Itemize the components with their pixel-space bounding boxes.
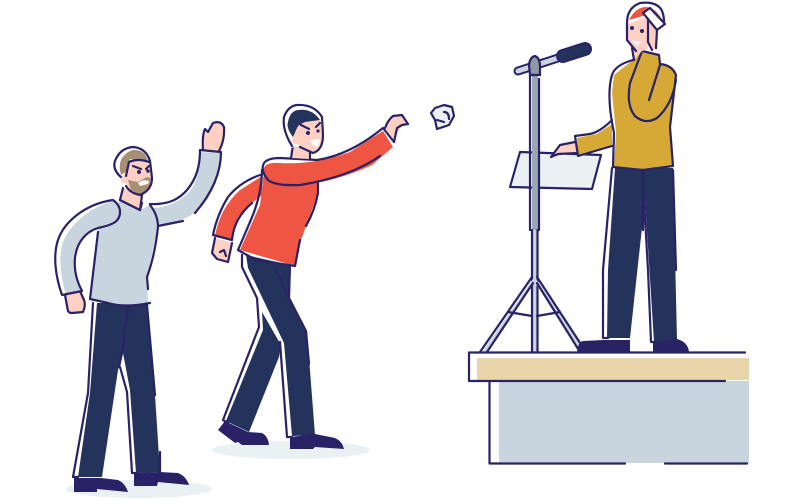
figure: bearded man raising hand xyxy=(55,122,224,492)
speaker arm and hand xyxy=(551,120,612,157)
figure: man throwing paper xyxy=(212,105,408,449)
podium xyxy=(469,352,749,464)
neck xyxy=(291,145,310,159)
throwing arm and hand xyxy=(263,115,408,185)
shoes xyxy=(74,472,189,492)
stand pole front of sheet xyxy=(530,150,539,190)
neck xyxy=(632,48,642,60)
left arm and fist xyxy=(55,200,120,313)
head xyxy=(284,105,323,153)
shoes xyxy=(218,421,344,449)
head with beard xyxy=(114,147,152,195)
clamp xyxy=(529,56,540,75)
raised arm and hand xyxy=(150,122,224,226)
shadow: middle man xyxy=(212,441,370,459)
microphone arm xyxy=(518,49,585,71)
podium body xyxy=(499,381,749,463)
sweater torso xyxy=(238,170,318,266)
left arm and fist xyxy=(212,175,262,262)
microphone stand xyxy=(480,49,586,352)
shoes xyxy=(577,339,689,352)
shadow: left man xyxy=(66,480,212,498)
sweater torso xyxy=(90,200,158,306)
podium outline xyxy=(469,352,747,464)
trousers xyxy=(603,168,677,342)
figure: speaker at podium xyxy=(551,3,689,352)
tripod legs xyxy=(480,277,586,352)
neck xyxy=(120,188,142,210)
podium top board xyxy=(477,358,749,380)
head and hand on forehead xyxy=(627,3,665,52)
sweater torso xyxy=(609,51,676,170)
stand pole xyxy=(530,75,539,352)
back leg trousers xyxy=(223,255,281,432)
trousers xyxy=(73,303,160,477)
paper ball xyxy=(431,104,454,129)
note stand sheet xyxy=(510,152,601,189)
front leg trousers xyxy=(246,255,315,437)
